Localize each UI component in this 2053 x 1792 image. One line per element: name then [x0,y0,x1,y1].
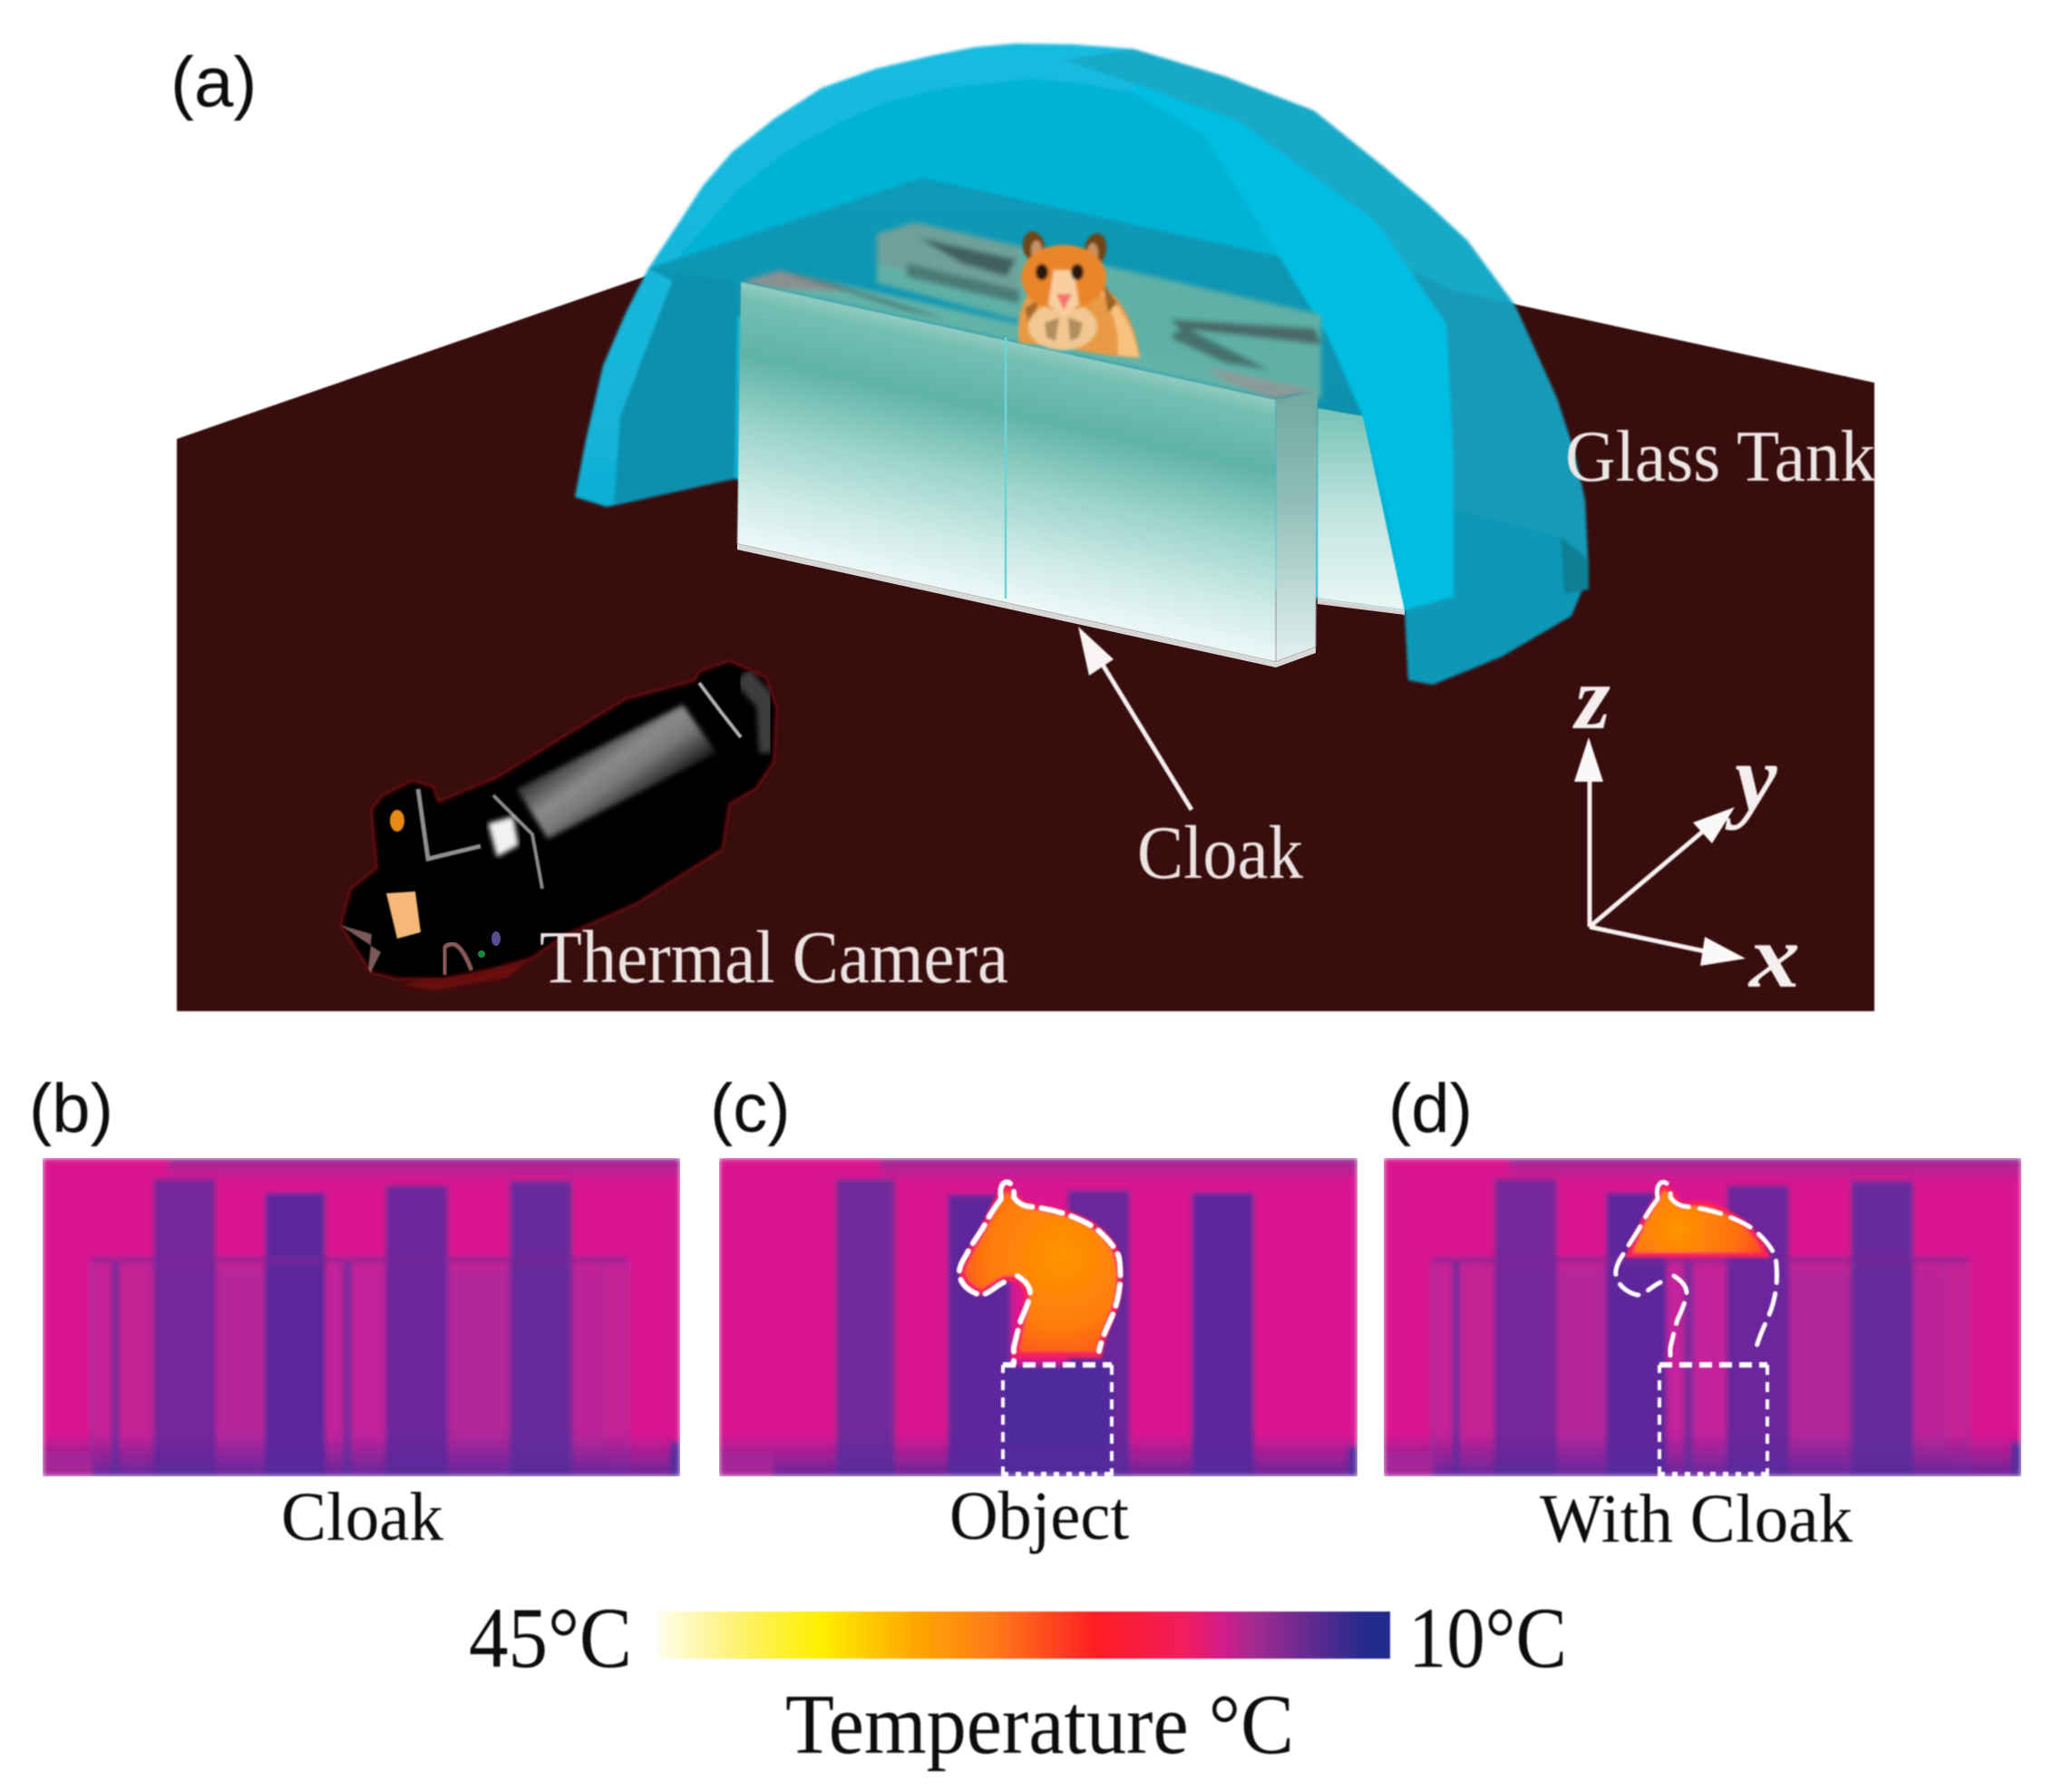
panel label (d): (d) [1388,1070,1473,1147]
panel label (b): (b) [29,1070,113,1147]
dark floor and back plane [177,248,1874,1011]
thermal camera [340,660,777,990]
legend: 45°C: 45°C [469,1590,632,1686]
dashed object box [1659,1365,1767,1476]
panel label (a): (a) [170,42,257,122]
cloak: slabs with hamster object [737,222,1405,667]
dashed object outline [959,1183,1121,1363]
panel c: thermal image of object [719,1158,1357,1476]
axis label x: x [1747,906,1800,1007]
legend: 10°C: 10°C [1408,1590,1567,1686]
label: thermal camera: Thermal Camera [540,915,1008,998]
panel label (c): (c) [710,1070,791,1147]
panel a: experimental setup [177,44,1875,1011]
panel d: thermal image with cloak [1384,1158,2021,1476]
legend: temperature colour bar [657,1612,1390,1659]
legend title: Temperature °C [785,1678,1294,1772]
dashed object outline [1616,1183,1777,1363]
heated object top [1629,1186,1766,1255]
caption: object: Object [949,1478,1129,1554]
hamster [1018,229,1140,358]
label: cloak: Cloak [1137,811,1303,895]
caption: with cloak: With Cloak [1540,1481,1853,1557]
label: glass tank: Glass Tank [1565,417,1875,497]
axis label z: z [1572,648,1610,748]
arrow: pointing to cloak [1078,627,1192,810]
heated object [962,1186,1119,1355]
axis label y: y [1725,725,1777,831]
caption: cloak: Cloak [281,1479,443,1555]
glass tank dome [573,41,1591,687]
panel b: thermal image of cloak [43,1158,680,1476]
dashed object box [1003,1365,1112,1476]
coordinate axes [1572,648,1800,1007]
